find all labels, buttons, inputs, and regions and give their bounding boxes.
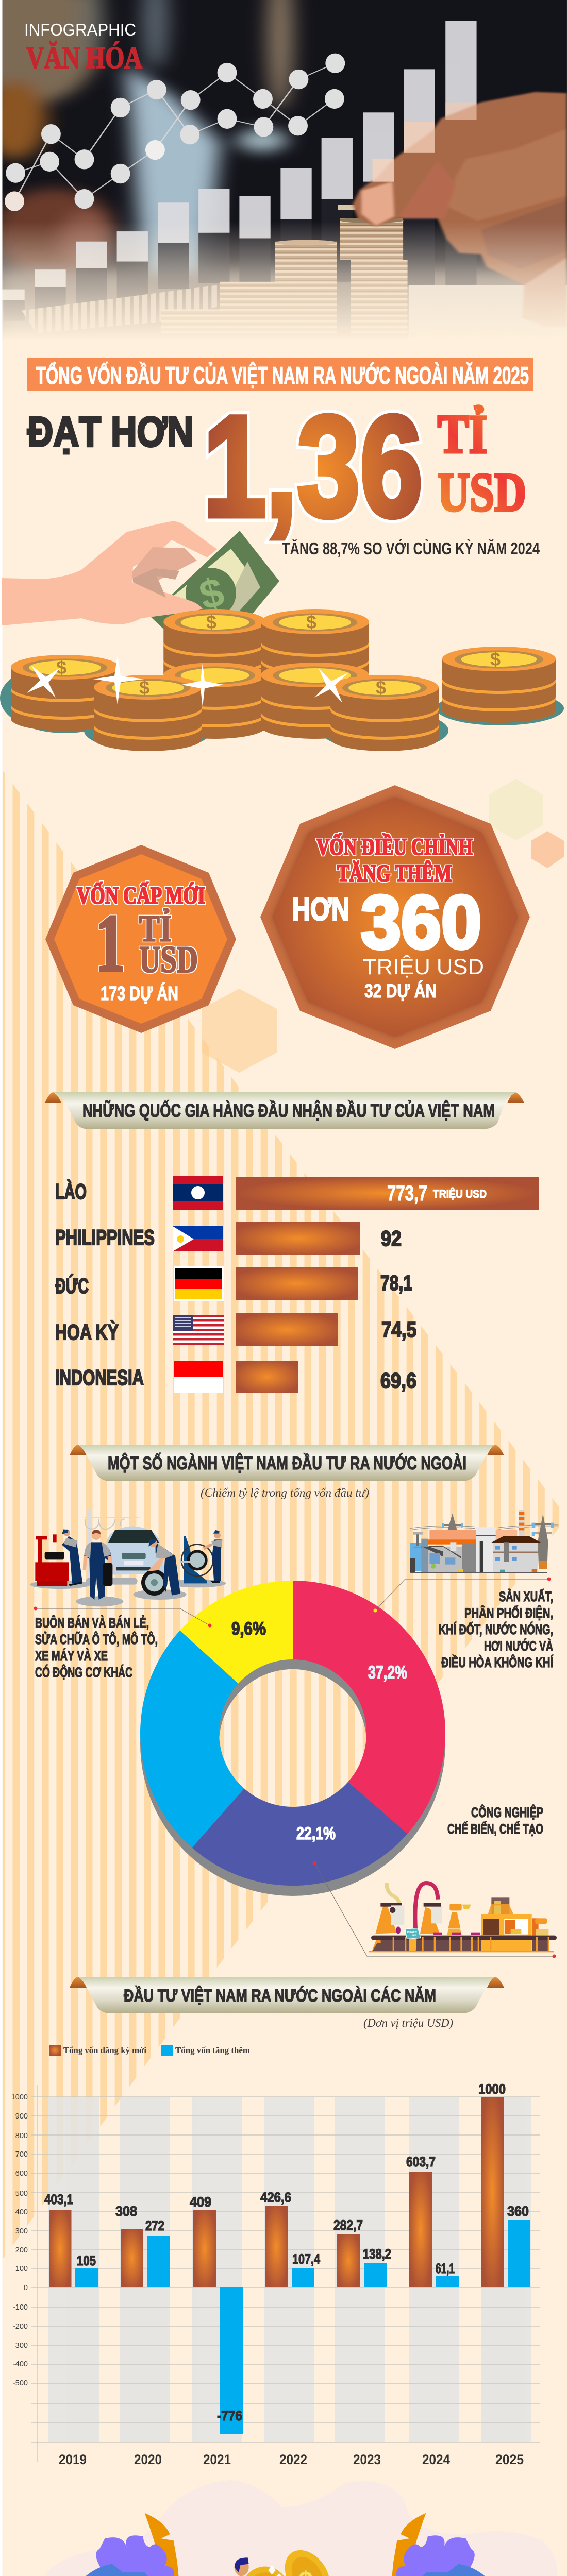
icon: flag of the USA [173, 1315, 224, 1345]
data labels: 403,1 [44, 2192, 73, 2207]
row: Philippines: 92 [381, 1226, 402, 1250]
axis labels: -200 [13, 2323, 28, 2331]
panel: vốn cấp mới: 173 DỰ ÁN [101, 982, 178, 1005]
data labels: 308 [115, 2204, 137, 2219]
callout: power, gas, water, air conditioning [373, 1578, 554, 1670]
year labels: 2022 [279, 2452, 307, 2467]
data labels: 426,6 [260, 2190, 291, 2205]
coins rising from wallet [252, 2548, 353, 2576]
row: Hoa Kỳ: 74,5 [381, 1317, 416, 1342]
unit: tỉ usd: USD [438, 462, 526, 522]
row: Lào [55, 1176, 539, 1210]
axis labels: 800 [15, 2132, 28, 2140]
logo: Infographic Văn Hóa: INFOGRAPHIC [24, 20, 136, 39]
data labels: 603,7 [406, 2154, 436, 2170]
year labels: 2023 [353, 2452, 381, 2467]
coin stacks with sparkles: $ [376, 677, 386, 698]
network lines and dots [19, 67, 327, 194]
headline: đạt hơn: ĐẠT HƠN [27, 409, 193, 455]
heading ribbon: sectors: MỘT SỐ NGÀNH VIỆT NAM ĐẦU TƯ RA NƯỚC NGOÀI [108, 1453, 466, 1473]
big number 1,36: 1,36 [203, 386, 423, 546]
unit: tỉ usd: TỈ [438, 404, 487, 464]
panel: vốn điều chỉnh tăng thêm: 360 [361, 880, 481, 964]
axis labels: 300 [15, 2227, 28, 2235]
row: Philippines [55, 1222, 402, 1255]
icon: factory conveyor line [369, 1883, 557, 1952]
orange bars [49, 2097, 504, 2287]
callout: retail and vehicle repair [34, 1606, 211, 1680]
icon: flag of Germany [174, 1266, 224, 1301]
icon: factory conveyor line: POWER [407, 1930, 417, 1934]
row: Indonesia [55, 1361, 416, 1393]
coin stacks with sparkles: $ [306, 612, 316, 633]
panel: vốn điều chỉnh tăng thêm: HƠN [292, 892, 349, 927]
chart legend [49, 2045, 250, 2056]
leaves [145, 2513, 180, 2576]
axis labels: 300 [15, 2342, 28, 2350]
coin stacks in photograph [22, 205, 408, 333]
panel: vốn điều chỉnh tăng thêm: TRIỆU USD [363, 955, 484, 979]
row: Đức: ĐỨC [55, 1273, 89, 1298]
donut chart: sectors: 37,2% [368, 1663, 407, 1683]
panel: vốn cấp mới: TỈ [139, 908, 172, 950]
panel: vốn điều chỉnh tăng thêm: TĂNG THÊM [337, 860, 452, 886]
icon: car mechanics [30, 1510, 226, 1606]
data labels: 105 [77, 2253, 96, 2268]
bar chart: investment by year [11, 2081, 540, 2467]
axis labels: 200 [15, 2246, 28, 2255]
hero photograph: hand stacking coins with rising bars [0, 0, 567, 363]
subtitle: unit: (Đơn vị triệu USD) [363, 2016, 453, 2029]
icon: flag of Indonesia [174, 1361, 223, 1393]
row: Hoa Kỳ [55, 1313, 416, 1346]
decorative hexagons [202, 779, 564, 1073]
illustration: hand with banknote [2, 521, 279, 670]
callout: processing and manufacturing [312, 1804, 556, 1958]
row: Lào: 773,7 [387, 1181, 427, 1205]
hand placing coin [353, 92, 567, 327]
background stripes [0, 762, 567, 2267]
axis labels: -500 [13, 2379, 28, 2387]
illustration: people, wallet and coins [4, 2480, 567, 2576]
heading ribbon: by year [70, 1977, 504, 2013]
row: Philippines: PHILIPPINES [55, 1225, 155, 1249]
logo: Infographic Văn Hóa: VĂN HÓA [26, 41, 142, 75]
data labels: 138,2 [363, 2246, 391, 2262]
row: Đức: 78,1 [380, 1271, 412, 1295]
panel: vốn cấp mới: USD [139, 939, 198, 981]
panel: vốn điều chỉnh tăng thêm: 32 DỰ ÁN [364, 980, 437, 1002]
axis labels [11, 2093, 28, 2387]
year labels: 2025 [495, 2452, 524, 2467]
row: Hoa Kỳ: HOA KỲ [55, 1320, 119, 1344]
callout: retail and vehicle repair: SỬA CHỮA Ô TÔ, MÔ TÔ, [35, 1631, 158, 1647]
year labels: 2019 [59, 2452, 87, 2467]
data labels: 61,1 [436, 2261, 455, 2276]
coin stacks with sparkles: $ [139, 677, 149, 698]
axis labels: 1000 [11, 2093, 28, 2102]
callout: retail and vehicle repair: CÓ ĐỘNG CƠ KHÁC [35, 1664, 132, 1680]
axis labels: -100 [13, 2303, 28, 2312]
icon: flag of the Philippines [173, 1226, 223, 1251]
big number 1,36: 1,36 [203, 386, 423, 546]
icon: banknote: $ [195, 568, 229, 619]
chart columns behind bars [4, 182, 476, 320]
data labels: -776 [217, 2408, 242, 2424]
data labels: 272 [145, 2218, 164, 2233]
row: Đức [55, 1266, 412, 1301]
panel: vốn cấp mới: VỐN CẤP MỚI [77, 881, 205, 909]
panel: vốn điều chỉnh tăng thêm [260, 785, 530, 1049]
axis labels: 100 [15, 2265, 28, 2273]
row: Indonesia: 69,6 [380, 1368, 416, 1393]
coin stacks with sparkles: $ [56, 657, 66, 678]
data labels: 360 [507, 2204, 529, 2219]
unit: tỉ usd [438, 404, 526, 522]
axis labels: -400 [13, 2360, 28, 2368]
heading ribbon: sectors [70, 1445, 504, 1481]
row: Lào: LÀO [55, 1179, 87, 1204]
data labels [44, 2081, 529, 2424]
icon: banknote [149, 531, 279, 670]
callout: retail and vehicle repair: BUÔN BÁN VÀ BÁN LẺ, [35, 1614, 149, 1631]
person on ladder with coin [225, 2557, 289, 2576]
year labels: 2021 [203, 2452, 231, 2467]
axis labels: 900 [15, 2112, 28, 2121]
donut chart: sectors [140, 1581, 445, 1896]
axis labels: 600 [15, 2170, 28, 2178]
year labels: 2020 [134, 2452, 162, 2467]
data labels: 409 [190, 2194, 211, 2210]
row: Lào: TRIỆU USD [433, 1188, 487, 1200]
blue bars [75, 2220, 530, 2434]
chart legend: Tổng vốn đăng ký mới [63, 2045, 146, 2055]
icon: power plant factory [410, 1510, 558, 1573]
axis labels: 500 [15, 2190, 28, 2198]
callout: retail and vehicle repair: XE MÁY VÀ XE [35, 1648, 108, 1664]
heading ribbon: top countries [45, 1092, 524, 1129]
axis labels: 0 [24, 2284, 28, 2292]
donut chart: sectors: 9,6% [231, 1619, 266, 1639]
donut chart: sectors: 22,1% [296, 1824, 336, 1843]
axis labels: 700 [15, 2150, 28, 2159]
bar chart: top countries [55, 1176, 539, 1393]
coin stacks with sparkles: $ [490, 649, 501, 670]
icon: flag of Laos [173, 1176, 223, 1210]
white chart bars [0, 21, 477, 300]
coin stacks with sparkles: $ [206, 612, 216, 633]
heading ribbon: by year: ĐẦU TƯ VIỆT NAM RA NƯỚC NGOÀI CÁC NĂM [124, 1986, 436, 2006]
panel: vốn cấp mới: 1 [95, 897, 125, 989]
data labels: 107,4 [292, 2251, 320, 2267]
coin stacks with sparkles [0, 609, 564, 751]
row: Indonesia: INDONESIA [55, 1365, 144, 1389]
chart legend: Tổng vốn tăng thêm [175, 2045, 250, 2055]
panel: vốn cấp mới [45, 845, 236, 1033]
axis labels: 400 [15, 2208, 28, 2216]
subtitle: share of total: (Chiếm tỷ lệ trong tổng vốn đầu tư) [201, 1486, 369, 1499]
panel: vốn điều chỉnh tăng thêm: VỐN ĐIỀU CHỈNH [316, 833, 473, 860]
year labels [59, 2452, 524, 2467]
year labels: 2024 [422, 2452, 450, 2467]
icon: factory conveyor line: ON [412, 1934, 416, 1937]
logo: Infographic Văn Hóa [24, 20, 142, 75]
data labels: 282,7 [333, 2217, 363, 2233]
data labels: 1000 [478, 2081, 506, 2097]
